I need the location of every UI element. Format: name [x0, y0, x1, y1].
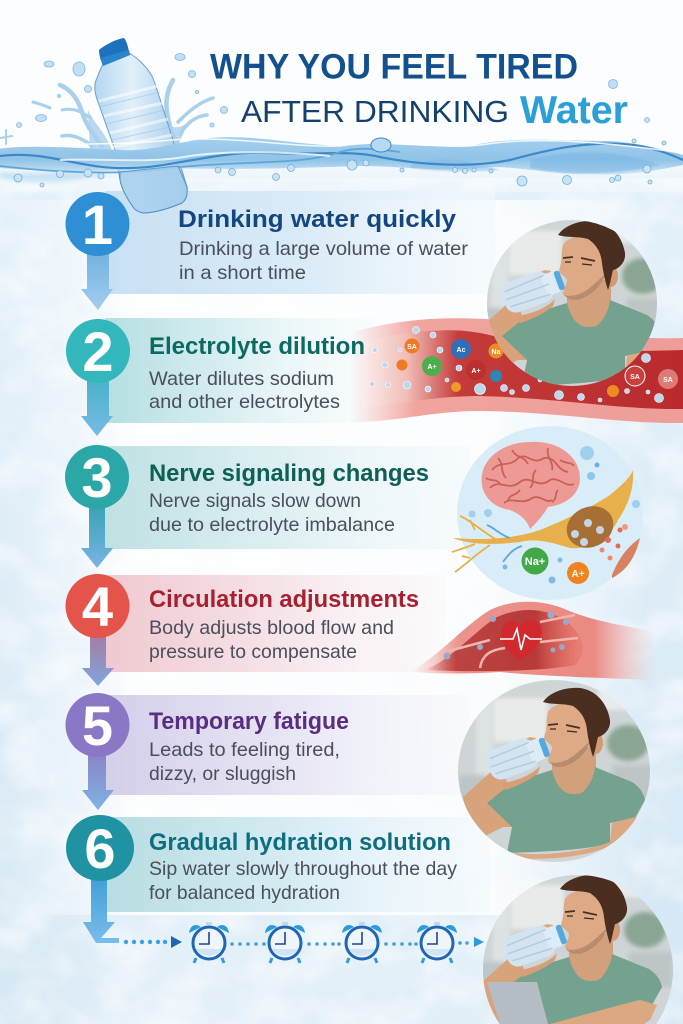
illustration: man drinking water with laptop: [483, 875, 673, 1024]
illustration: blood vessel with electrolytes: [350, 318, 683, 423]
step 1: arrow, badge, text: Drinking a large volume of water: [179, 239, 469, 260]
step 3: arrow, badge, text: 3: [81, 446, 113, 509]
step 2 band: [105, 318, 375, 423]
ions and droplets: Na+: [525, 556, 545, 568]
illustration: man drinking water, step 1: [487, 220, 657, 386]
step 5: arrow, badge, text: Leads to feeling tired,: [149, 740, 340, 761]
step 6 band: [105, 817, 490, 912]
ions and droplets: A+: [571, 569, 585, 580]
illustration: blood vessel with electrolytes: SA: [407, 344, 417, 351]
title: AFTER DRINKING: [241, 94, 509, 129]
title: Water: [520, 89, 628, 132]
step 5: arrow, badge, text: 5: [82, 694, 113, 757]
step 5: arrow, badge, text: Temporary fatigue: [149, 708, 349, 735]
step 4: arrow, badge, text: Circulation adjustments: [149, 586, 419, 613]
illustration: water bottle: [95, 38, 187, 213]
clock 4: [417, 922, 457, 963]
illustration: blood vessel with electrolytes: SA: [630, 374, 640, 381]
illustration: blood vessel with electrolytes: A+: [471, 368, 481, 375]
neuron: [452, 470, 633, 572]
step 5: arrow, badge, text: dizzy, or sluggish: [149, 764, 296, 785]
step 1: arrow, badge, text: 1: [82, 193, 113, 256]
step 3: arrow, badge, text: [65, 445, 429, 568]
illustration: blood vessel with electrolytes: Na: [492, 349, 501, 356]
clock 3: [342, 922, 382, 963]
illustration: man drinking water, step 5: [458, 680, 650, 862]
illustration: brain and neuron: [452, 426, 643, 600]
clock 1: [189, 922, 229, 963]
bottle lower part in front of water: [120, 166, 187, 213]
step 2: arrow, badge, text: 2: [82, 320, 114, 383]
step 1: arrow, badge, text: in a short time: [179, 263, 306, 284]
step 3: arrow, badge, text: Nerve signaling changes: [149, 460, 429, 487]
step 1: arrow, badge, text: [66, 192, 469, 310]
step 1: arrow, badge, text: Drinking water quickly: [178, 206, 457, 233]
brain: [482, 442, 580, 529]
step 6: arrow, badge, text: Gradual hydration solution: [149, 829, 451, 856]
step 3: arrow, badge, text: due to electrolyte imbalance: [149, 515, 395, 536]
timeline: dots and arrows between clocks: [124, 936, 484, 948]
illustration: blood vessel with heart: [410, 602, 655, 680]
step 6: arrow, badge, text: for balanced hydration: [149, 883, 340, 904]
step 2: arrow, badge, text: Electrolyte dilution: [149, 333, 365, 360]
step 3 band: [105, 446, 470, 549]
illustration: blood vessel with electrolytes: SA: [663, 377, 673, 384]
step 3: arrow, badge, text: Nerve signals slow down: [149, 491, 361, 512]
title: [210, 48, 628, 132]
step 4: arrow, badge, text: [66, 574, 419, 686]
step 5 band: [105, 695, 470, 795]
water splash and droplets: [0, 54, 650, 150]
step 6: arrow, badge, text: [66, 815, 457, 943]
title: WHY YOU FEEL TIRED: [210, 48, 578, 86]
illustration: blood vessel with electrolytes: A+: [427, 364, 437, 371]
step 2: arrow, badge, text: Water dilutes sodium: [149, 369, 334, 390]
step 4: arrow, badge, text: 4: [82, 575, 113, 638]
step 4: arrow, badge, text: pressure to compensate: [149, 642, 357, 663]
step 4 band: [105, 575, 445, 672]
ions and droplets: [468, 446, 640, 584]
step 2: arrow, badge, text: [66, 319, 365, 436]
water surface wave: [0, 137, 683, 187]
step 6: arrow, badge, text: 6: [84, 817, 116, 880]
step 4: arrow, badge, text: Body adjusts blood flow and: [149, 618, 394, 639]
step 6: arrow, badge, text: Sip water slowly throughout the day: [149, 859, 457, 880]
step 1 band: [105, 191, 495, 294]
heart: [501, 620, 541, 660]
illustration: blood vessel with electrolytes: Ac: [457, 347, 466, 354]
step 5: arrow, badge, text: [66, 693, 349, 810]
step 2: arrow, badge, text: and other electrolytes: [149, 392, 340, 413]
clock 2: [265, 922, 305, 963]
